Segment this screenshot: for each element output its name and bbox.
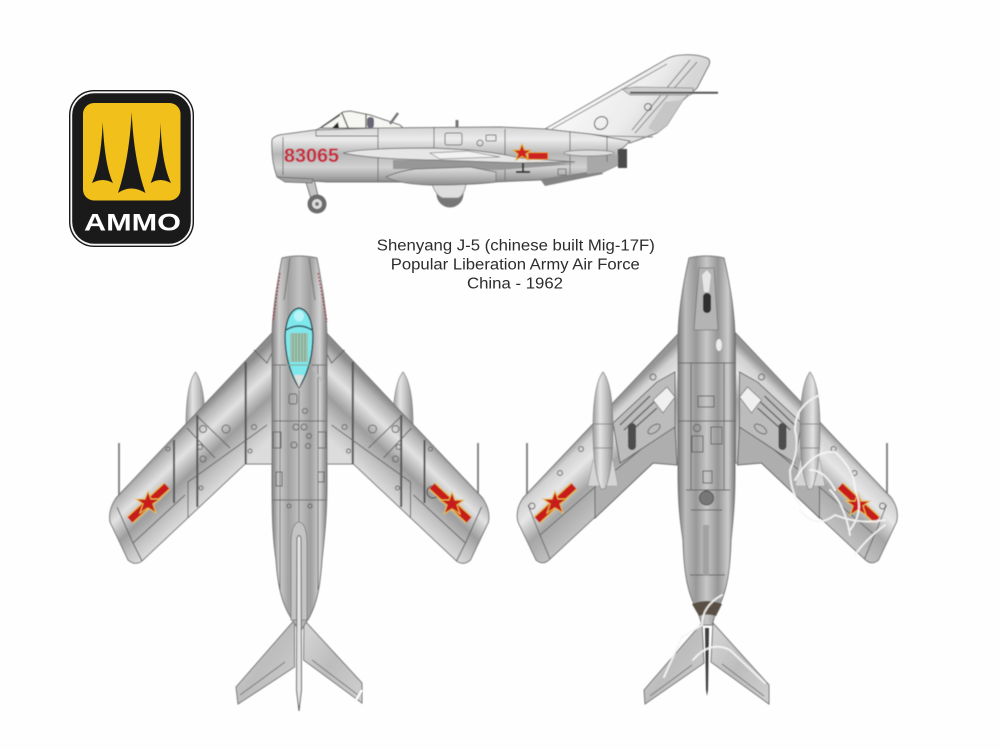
ventral strip	[703, 525, 709, 575]
rear shading	[587, 155, 618, 174]
tail plane	[622, 87, 718, 95]
side roundel	[513, 144, 548, 160]
left drop tank	[588, 372, 618, 489]
title text: Shenyang J-5 (chinese built Mig-17F)	[377, 238, 655, 254]
round intake	[700, 491, 714, 505]
tailplane	[236, 620, 362, 704]
left wing roundel	[130, 486, 167, 520]
hatches	[692, 396, 722, 483]
wing tanks	[186, 372, 413, 425]
title text: China - 1962	[467, 276, 563, 292]
canopy	[285, 308, 323, 388]
panel lines	[272, 258, 327, 590]
vertical fin	[705, 628, 709, 696]
logo: AMMO badge: AMMO	[84, 210, 181, 236]
right wing	[326, 333, 489, 563]
nozzle	[692, 601, 722, 616]
right drop tank	[795, 372, 825, 489]
drop tank	[386, 167, 496, 185]
canopy	[320, 111, 403, 130]
left tail scratch	[356, 690, 362, 700]
side view aircraft	[272, 55, 718, 213]
dotted rivets	[273, 273, 327, 322]
exhaust	[618, 149, 627, 168]
title text	[377, 238, 655, 292]
left wing	[110, 333, 273, 563]
nose gear	[305, 179, 326, 214]
dorsal fin spine	[291, 522, 307, 620]
title text: Popular Liberation Army Air Force	[391, 256, 640, 274]
panel lines	[678, 363, 735, 575]
vertical fin	[296, 536, 302, 711]
right wing roundel	[840, 486, 877, 520]
nose gear well	[694, 268, 722, 351]
fuselage	[272, 256, 327, 632]
main gear	[432, 180, 466, 208]
nose gear door	[277, 177, 313, 183]
left wing underside	[517, 333, 679, 563]
aerials	[119, 443, 478, 497]
fuselage	[678, 256, 735, 625]
serial number: 83065	[284, 146, 339, 167]
ventral strake	[540, 170, 603, 186]
tailplane	[644, 623, 769, 704]
fuselage	[272, 127, 630, 182]
logo: AMMO badge	[69, 90, 194, 247]
left wing roundel	[537, 486, 574, 520]
wing	[343, 148, 575, 172]
top view aircraft	[110, 256, 489, 711]
bottom view aircraft	[517, 256, 897, 704]
rear fairing	[564, 150, 614, 156]
antenna and hatches	[445, 120, 566, 175]
under-wing shadow	[393, 160, 575, 170]
tail fin	[545, 55, 710, 143]
hatches	[273, 394, 326, 508]
watermark scratches	[664, 395, 885, 683]
right wing underside	[736, 333, 897, 563]
aerials	[527, 443, 887, 498]
panel lines	[283, 127, 607, 182]
right wing roundel	[427, 486, 469, 520]
